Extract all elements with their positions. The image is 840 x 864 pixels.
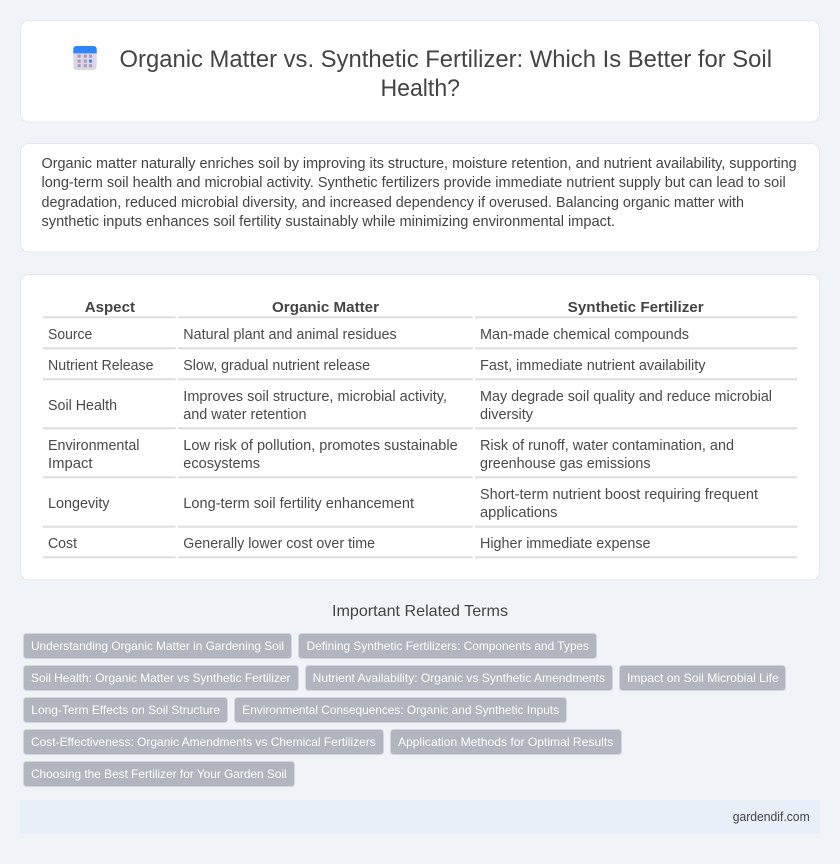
title: Organic Matter vs. Synthetic Fertilizer: Which Is Better for Soil — [120, 46, 772, 73]
tag: Defining Synthetic Fertilizers — [298, 634, 596, 658]
tag: Impact on Soil Microbial Life — [620, 666, 786, 690]
table row: Environmental Impact: Risk of runoff, water contamination, and — [480, 438, 734, 454]
table row: Environmental Impact: greenhouse gas emissions — [480, 456, 650, 472]
table row: Nutrient Release: Nutrient Release — [48, 358, 154, 374]
tag: Application Methods: Application Methods for Optimal Results — [398, 735, 613, 749]
table row: Environmental Impact: Low risk of pollution, promotes sustainable — [183, 438, 458, 454]
table row: Cost: Generally lower cost over time — [183, 536, 375, 552]
tag: Nutrient Availability: Nutrient Availability: Organic vs Synthetic Amendments — [313, 671, 605, 685]
panel: comparison table — [20, 274, 820, 580]
table row: Longevity — [43, 487, 797, 528]
tag: Environmental Consequences — [234, 698, 566, 722]
title: Health? — [380, 75, 460, 102]
table header row — [43, 299, 797, 318]
table header row: Organic Matter — [272, 299, 379, 316]
tag: Choosing the Best Fertilizer — [24, 762, 294, 786]
table row: Source: Man-made chemical compounds — [480, 327, 689, 343]
table row: Longevity: Long-term soil fertility enhancement — [183, 496, 414, 512]
table row: Source: Natural plant and animal residues — [183, 327, 397, 343]
heading: Important Related Terms: Important Related Terms — [332, 603, 508, 620]
table row: Longevity: Longevity — [48, 496, 110, 512]
tag: Cost-Effectiveness — [24, 730, 384, 754]
table row: Environmental Impact: ecosystems — [183, 456, 260, 472]
tag: Long-Term Effects — [24, 698, 228, 722]
intro paragraph — [42, 156, 797, 230]
intro paragraph: degradation, reduced microbial diversity, and increased dependency if overused. Balancing organic matter with — [42, 195, 744, 211]
table row: Soil Health: May degrade soil quality and reduce microbial — [480, 389, 772, 405]
tag: Understanding Organic Matter: Understanding Organic Matter in Gardening Soil — [31, 639, 284, 653]
table row: Soil Health — [43, 389, 797, 429]
title — [120, 46, 772, 102]
related term tags — [24, 634, 786, 786]
table row: Cost: Higher immediate expense — [480, 536, 650, 552]
table row: Source — [43, 327, 797, 349]
table header row: Aspect — [85, 299, 135, 316]
table row: Environmental Impact: Environmental — [48, 438, 140, 454]
intro paragraph: long-term soil health and microbial activity. Synthetic fertilizers provide immediate nutrient supply but can lead to soil — [42, 175, 786, 191]
tag: Soil Health — [24, 666, 298, 690]
table row: Longevity: applications — [480, 505, 558, 521]
table row: Nutrient Release — [43, 358, 797, 380]
table row: Source: Source — [48, 327, 92, 343]
footer bar — [20, 800, 820, 834]
tag: Impact on Soil Microbial Life: Impact on Soil Microbial Life — [627, 671, 779, 685]
tag: Understanding Organic Matter — [24, 634, 292, 658]
intro paragraph: synthetic inputs enhances soil fertility sustainably while minimizing environmental impact. — [42, 214, 615, 230]
table row: Longevity: Short-term nutrient boost requiring frequent — [480, 487, 758, 503]
table row: Soil Health: and water retention — [183, 407, 306, 423]
tag: Long-Term Effects: Long-Term Effects on Soil Structure — [31, 703, 220, 717]
table header row: Synthetic Fertilizer — [568, 299, 704, 316]
tag: Environmental Consequences: Environmental Consequences: Organic and Synthetic Inputs — [242, 703, 559, 717]
table row: Environmental Impact: Impact — [48, 456, 93, 472]
tag: Defining Synthetic Fertilizers: Defining Synthetic Fertilizers: Components and Types — [306, 639, 589, 653]
table row: Soil Health: diversity — [480, 407, 534, 423]
tag: Choosing the Best Fertilizer: Choosing the Best Fertilizer for Your Garden Soil — [31, 767, 287, 781]
intro paragraph: Organic matter naturally enriches soil by improving its structure, moisture retention, and nutrient availability, supporting — [42, 156, 797, 172]
tag: Application Methods — [390, 730, 622, 754]
panel: header — [20, 20, 820, 122]
table row: Cost — [43, 536, 797, 558]
panel: introduction — [20, 144, 820, 252]
footer site name: gardendif.com — [733, 809, 810, 824]
tag: Nutrient Availability — [306, 666, 612, 690]
table row: Soil Health: Soil Health — [48, 398, 117, 414]
icon: calendar — [73, 46, 97, 70]
tag: Cost-Effectiveness: Cost-Effectiveness: Organic Amendments vs Chemical Fertilizers — [31, 735, 376, 749]
table row: Nutrient Release: Slow, gradual nutrient release — [183, 358, 370, 374]
table row: Soil Health: Improves soil structure, microbial activity, — [183, 389, 447, 405]
table row: Cost: Cost — [48, 536, 77, 552]
table row: Nutrient Release: Fast, immediate nutrient availability — [480, 358, 706, 374]
tag: Soil Health: Soil Health: Organic Matter vs Synthetic Fertilizer — [31, 671, 291, 685]
table row: Environmental Impact — [43, 438, 797, 478]
